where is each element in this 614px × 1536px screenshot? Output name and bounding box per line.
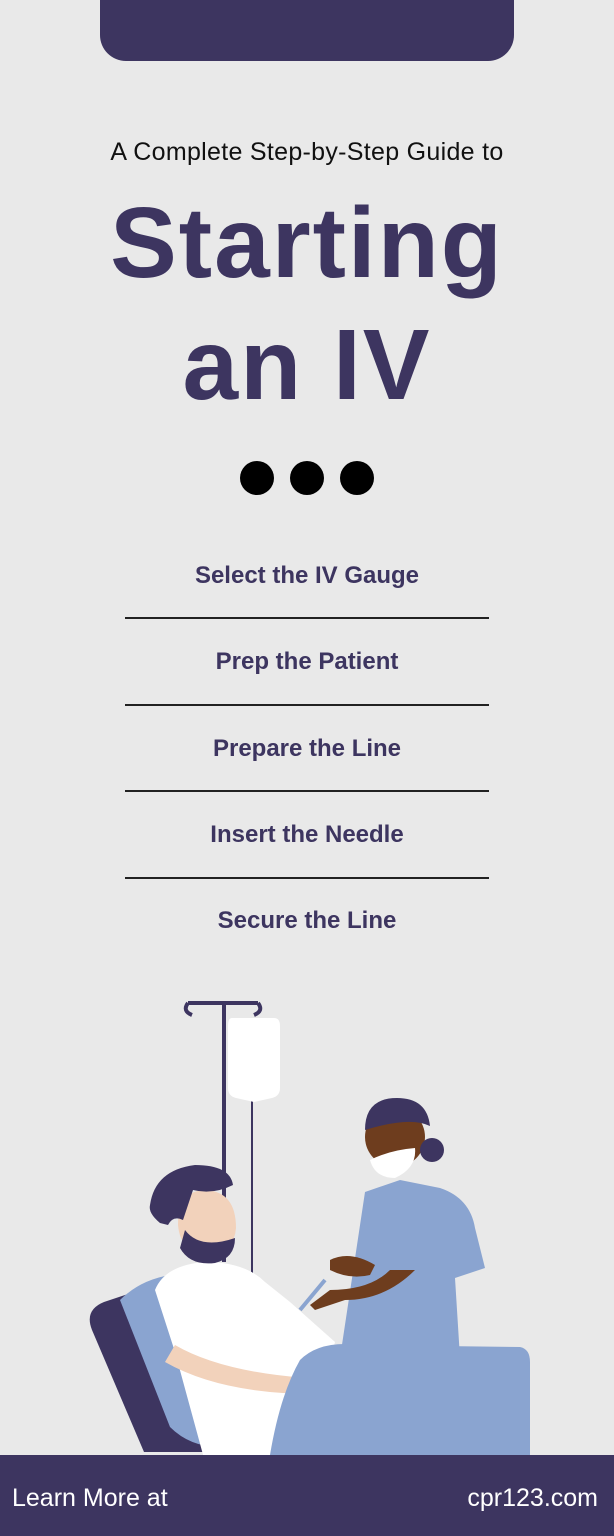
dots — [240, 461, 374, 495]
iv pole — [186, 1003, 260, 1280]
title: Starting — [110, 187, 504, 299]
footer bar — [0, 1455, 614, 1536]
step 1: Select the IV Gauge — [195, 562, 419, 589]
step 2: Prep the Patient — [216, 648, 398, 675]
step 4: Insert the Needle — [210, 821, 404, 848]
blanket — [270, 1344, 530, 1455]
footer right text: cpr123.com — [467, 1484, 598, 1512]
step 3: Prepare the Line — [213, 735, 401, 762]
title — [110, 187, 504, 421]
illustration: nurse starting IV on patient — [90, 1001, 530, 1455]
nurse — [300, 1098, 485, 1358]
patient — [150, 1165, 369, 1462]
title: an IV — [183, 309, 431, 421]
iv bag — [228, 1018, 280, 1102]
top tab — [100, 0, 514, 61]
step list — [125, 562, 489, 934]
footer left text: Learn More at — [12, 1484, 168, 1512]
chair — [90, 1275, 260, 1452]
subtitle: A Complete Step-by-Step Guide to — [110, 138, 504, 166]
step 5: Secure the Line — [218, 907, 396, 934]
